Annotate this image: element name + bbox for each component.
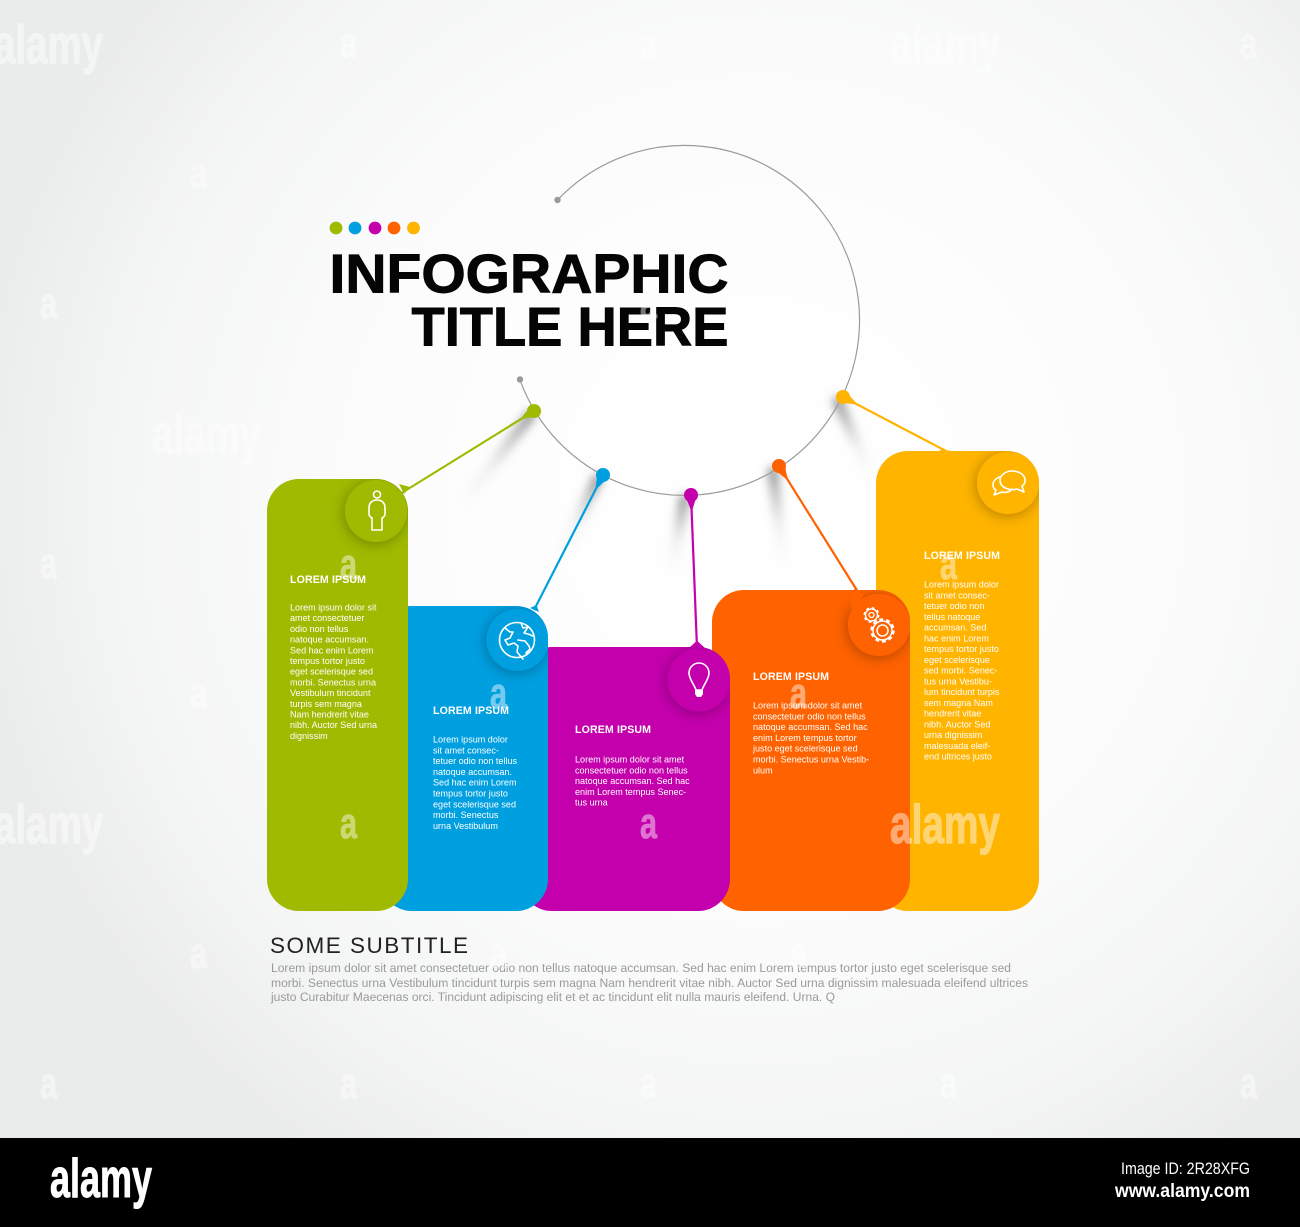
text: yellow: hendrerit vitae	[924, 708, 981, 718]
footer url: www.alamy.com	[1114, 1181, 1250, 1202]
text: green: Vestibulum tincidunt	[290, 688, 371, 698]
text: yellow: lum tincidunt turpis	[924, 687, 1000, 697]
watermark: a	[340, 19, 357, 68]
watermark: a	[340, 1059, 357, 1108]
icon: orange gears	[848, 589, 910, 656]
text: green: eget scelerisque sed	[290, 667, 373, 677]
text: orange: Lorem ipsum dolor sit amet	[753, 700, 863, 710]
watermark: a	[640, 1059, 657, 1108]
text: yellow: nibh. Auctor Sed	[924, 719, 990, 729]
text: green: natoque accumsan.	[290, 635, 369, 645]
connector: green	[399, 404, 541, 494]
watermark: a	[1240, 1059, 1257, 1108]
text: blue	[433, 734, 517, 831]
icon: magenta light bulb	[668, 648, 730, 712]
watermark: a	[190, 929, 207, 978]
title: INFOGRAPHIC	[330, 242, 728, 304]
watermark: a	[940, 1059, 957, 1108]
text: green: amet consectetuer	[290, 613, 364, 623]
watermark: a	[40, 279, 57, 328]
circular arc timeline	[517, 145, 860, 495]
text: magenta	[575, 754, 690, 808]
text: yellow: hac enim Lorem	[924, 633, 989, 643]
panel: magenta	[520, 488, 730, 911]
text: green: dignissim	[290, 731, 328, 741]
heading: magenta: LOREM IPSUM	[575, 724, 651, 736]
watermark: a	[1240, 19, 1257, 68]
text: orange: justo eget scelerisque sed	[752, 744, 858, 754]
title	[330, 242, 728, 358]
text: magenta: tus urna	[575, 798, 609, 808]
footer bar	[0, 1138, 1300, 1227]
text: magenta: enim Lorem tempus Senec-	[575, 787, 686, 797]
footer image id: Image ID: 2R28XFG	[1121, 1159, 1250, 1178]
text: blue: urna Vestibulum	[433, 821, 498, 831]
text: blue: sit amet consec-	[433, 745, 499, 755]
text: green: Lorem ipsum dolor sit	[290, 602, 377, 612]
text: yellow: malesuada eleif-	[924, 741, 990, 751]
watermark: a	[190, 669, 207, 718]
text: green: odio non tellus	[290, 624, 349, 634]
text: orange: consectetuer odio non tellus	[753, 711, 866, 721]
watermark: a	[640, 799, 657, 848]
footer logo: alamy	[50, 1147, 152, 1209]
text: green	[290, 602, 378, 741]
watermark: a	[640, 279, 657, 328]
text: orange	[752, 700, 869, 775]
text: yellow: Lorem ipsum dolor	[924, 580, 999, 590]
text: green: turpis sem magna	[290, 699, 363, 709]
text: magenta: natoque accumsan. Sed hac	[575, 776, 690, 786]
watermark: a	[490, 669, 507, 718]
text: orange: natoque accumsan. Sed hac	[753, 722, 868, 732]
text: blue: tempus tortor justo	[433, 788, 508, 798]
description text: justo Curabitur Maecenas orci. Tincidunt adipiscing elit et et ac tincidunt elit nulla mauris eleifend. Urna. Q	[270, 990, 835, 1004]
text: green: morbi. Senectus urna	[290, 677, 377, 687]
pin shadows	[462, 402, 872, 572]
title: TITLE HERE	[412, 296, 728, 358]
watermark: a	[790, 929, 807, 978]
text: blue: Sed hac enim Lorem	[433, 778, 516, 788]
watermark: a	[40, 1059, 57, 1108]
panel: green	[267, 404, 541, 911]
text: magenta: Lorem ipsum dolor sit amet	[575, 754, 685, 764]
text: yellow: tempus tortor justo	[924, 644, 999, 654]
text: green: nibh. Auctor Sed urna	[290, 720, 378, 730]
text: orange: morbi. Senectus urna Vestib-	[753, 754, 869, 764]
panel: blue	[380, 468, 610, 911]
panel: orange	[712, 459, 910, 911]
connector: yellow	[836, 390, 954, 452]
watermark: a	[640, 19, 657, 68]
watermark: a	[340, 540, 357, 589]
description text	[270, 961, 1028, 1004]
text: yellow: tetuer odio non	[924, 601, 984, 611]
text: yellow: end ultrices justo	[924, 752, 992, 762]
text: yellow: sit amet consec-	[924, 590, 990, 600]
text: green: Sed hac enim Lorem	[290, 645, 373, 655]
text: green: tempus tortor justo	[290, 656, 365, 666]
text: magenta: consectetuer odio non tellus	[575, 765, 688, 775]
watermark: a	[790, 669, 807, 718]
description text: Lorem ipsum dolor sit amet consectetuer odio non tellus natoque accumsan. Sed hac enim Lorem tempus tortor justo eget scelerisque sed	[271, 961, 1011, 975]
icon: green person	[345, 480, 407, 542]
colour dots	[330, 222, 420, 234]
watermark: alamy	[890, 13, 1000, 75]
heading: orange: LOREM IPSUM	[753, 671, 829, 683]
watermark: alamy	[890, 793, 1000, 855]
description text: morbi. Senectus urna Vestibulum tincidunt turpis sem magna Nam hendrerit vitae nibh. Auctor Sed urna dignissim malesuada eleifend ultrices	[271, 976, 1028, 990]
subtitle: SOME SUBTITLE	[270, 933, 468, 958]
text: green: Nam hendrerit vitae	[290, 710, 369, 720]
heading: yellow: LOREM IPSUM	[924, 550, 1000, 562]
text: blue: morbi. Senectus	[433, 810, 499, 820]
text: yellow: sed morbi. Senec-	[924, 666, 997, 676]
icon: blue globe	[486, 609, 548, 671]
text: blue: eget scelerisque sed	[433, 799, 516, 809]
heading: blue: LOREM IPSUM	[433, 705, 509, 717]
watermark: a	[40, 539, 57, 588]
icon: yellow speech bubbles	[977, 452, 1039, 514]
watermark: a	[490, 929, 507, 978]
text: yellow: eget scelerisque	[924, 655, 990, 665]
text: yellow: sem magna Nam	[924, 698, 993, 708]
watermark: a	[940, 540, 957, 589]
text: blue: tetuer odio non tellus	[433, 756, 517, 766]
watermark: alamy	[152, 403, 261, 465]
text: yellow: tellus natoque	[924, 612, 980, 622]
text: yellow: accumsan. Sed	[924, 622, 986, 632]
text: yellow: tus urna Vestibu-	[924, 676, 992, 686]
connector: magenta	[684, 488, 705, 648]
watermark: a	[190, 149, 207, 198]
text: yellow: urna dignissim	[924, 730, 982, 740]
watermark: a	[340, 799, 357, 848]
text: blue: natoque accumsan.	[433, 767, 512, 777]
heading: green: LOREM IPSUM	[290, 574, 366, 586]
text: yellow	[924, 580, 1000, 762]
text: orange: ulum	[753, 765, 773, 775]
text: blue: Lorem ipsum dolor	[433, 734, 508, 744]
connector: orange	[772, 459, 858, 592]
panel: yellow	[836, 390, 1039, 911]
connector: blue	[530, 468, 610, 612]
text: orange: enim Lorem tempus tortor	[753, 733, 857, 743]
